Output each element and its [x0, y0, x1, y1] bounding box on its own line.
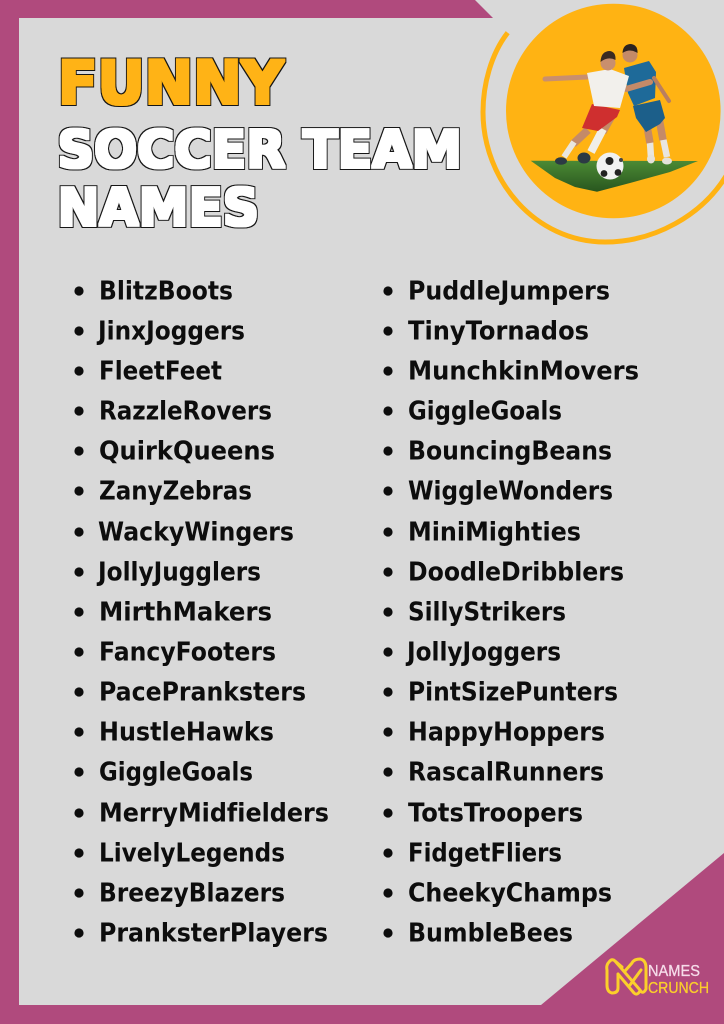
logo: Names Crunch	[607, 959, 709, 997]
item: BumbleBees	[408, 918, 573, 948]
yellow circle	[506, 4, 721, 218]
item: BlitzBoots	[99, 276, 233, 306]
title: SOCCER TEAM	[58, 120, 462, 180]
item: HustleHawks	[99, 718, 274, 748]
item: FleetFeet	[99, 356, 222, 386]
item: JollyJoggers	[405, 638, 561, 668]
item: JinxJoggers	[96, 316, 245, 346]
item: QuirkQueens	[99, 436, 275, 466]
item: HappyHoppers	[408, 718, 605, 748]
item: FancyFooters	[99, 638, 276, 668]
logo: Names Crunch: NAMES	[648, 963, 700, 980]
item: CheekyChamps	[408, 878, 612, 908]
item: ZanyZebras	[99, 476, 252, 506]
item: BreezyBlazers	[99, 878, 285, 908]
item: MirthMakers	[99, 598, 272, 628]
item: DoodleDribblers	[408, 558, 624, 588]
grass patch	[531, 161, 698, 192]
item: WiggleWonders	[408, 476, 613, 506]
item: MiniMighties	[408, 518, 581, 548]
name list: right column	[383, 276, 639, 948]
decorative arc	[483, 33, 724, 242]
item: PintSizePunters	[408, 678, 618, 708]
item: MunchkinMovers	[408, 356, 639, 386]
item: PuddleJumpers	[408, 276, 610, 306]
player in blue	[622, 44, 672, 164]
item: RazzleRovers	[99, 396, 272, 426]
item: TinyTornados	[408, 316, 589, 346]
item: WackyWingers	[98, 518, 294, 548]
soccer ball	[596, 152, 624, 180]
item: RascalRunners	[408, 758, 604, 788]
item: LivelyLegends	[99, 838, 285, 868]
item: PranksterPlayers	[99, 918, 328, 948]
item: MerryMidfielders	[99, 798, 329, 828]
title	[58, 48, 462, 239]
logo: Names Crunch: CRUNCH	[648, 980, 709, 997]
item: PacePranksters	[99, 678, 306, 708]
item: TotsTroopers	[408, 798, 583, 828]
item: GiggleGoals	[408, 396, 562, 426]
illustration: soccer players on yellow circle	[506, 4, 721, 218]
player in white and red	[545, 51, 650, 165]
name list: left column	[74, 276, 329, 948]
item: GiggleGoals	[99, 758, 253, 788]
logo mark	[607, 959, 646, 994]
title: FUNNY	[58, 48, 285, 118]
item: FidgetFliers	[408, 838, 562, 868]
item: SillyStrikers	[408, 598, 566, 628]
item: JollyJugglers	[96, 558, 261, 588]
title: NAMES	[58, 179, 259, 239]
item: BouncingBeans	[408, 436, 612, 466]
